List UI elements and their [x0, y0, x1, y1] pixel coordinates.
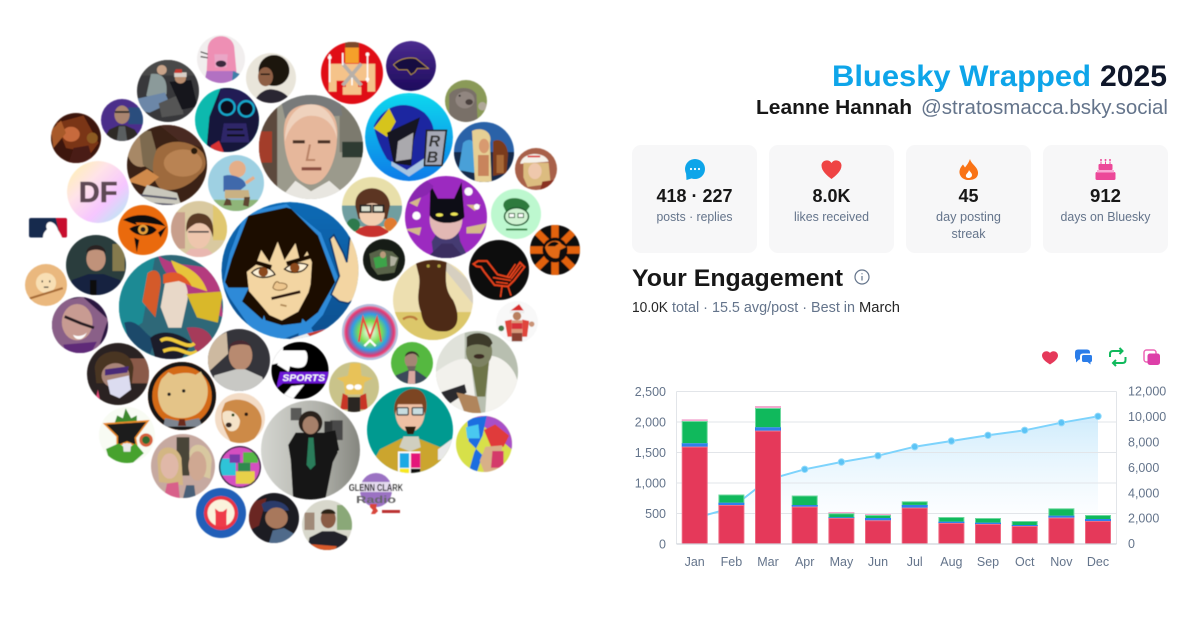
- stat card: likes: likes received: [794, 209, 869, 224]
- avatar: large brown-haired cartoon with raised hand: [222, 202, 362, 339]
- left axis labels: 0: [659, 538, 666, 552]
- avatar: Glenn Clark Radio logo: Radio: [356, 494, 396, 506]
- left axis labels: 1,500: [635, 446, 666, 460]
- month labels: Apr: [795, 555, 814, 569]
- right axis labels: 8,000: [1128, 436, 1159, 450]
- avatar: DF logo: DF: [79, 177, 118, 209]
- avatar: RB ranger helmet: B: [427, 150, 438, 167]
- avatar: sports logo: SPORTS: [282, 372, 326, 383]
- month labels: Oct: [1015, 555, 1035, 569]
- month labels: May: [830, 555, 854, 569]
- avatar: teal cartoon man: [367, 387, 455, 473]
- avatar: RB ranger helmet: R: [429, 134, 441, 151]
- month labels: Mar: [757, 555, 779, 569]
- icon: cake: [1096, 159, 1116, 180]
- avatar: group photo: [137, 60, 199, 122]
- icon: replies chat: [1075, 350, 1092, 364]
- right axis labels: [1128, 384, 1166, 551]
- engagement summary: 10.0K: [632, 300, 668, 316]
- month labels: [685, 555, 1109, 569]
- avatar: DF logo: [67, 161, 129, 223]
- avatar: Batman cartoon: [405, 176, 487, 258]
- avatar: beaver and man with cat: [127, 125, 207, 205]
- avatar: bear in a suit: [148, 362, 216, 430]
- avatar: Hulk in bathrobe: [436, 331, 518, 413]
- right axis labels: 0: [1128, 537, 1135, 551]
- right axis labels: 2,000: [1128, 512, 1159, 526]
- avatar: laughing man with glasses: [52, 297, 108, 353]
- engagement summary: total · 15.5 avg/post · Best in: [672, 300, 855, 316]
- avatar: Darth Vader with glasses: [195, 88, 259, 152]
- right axis labels: 4,000: [1128, 486, 1159, 500]
- avatar: man in black t-shirt: [302, 500, 352, 550]
- stat card: likes: 8.0K: [812, 186, 850, 206]
- icon: chat bubble: [685, 159, 705, 180]
- month labels: Jan: [685, 555, 705, 569]
- icon: quotes squares: [1144, 350, 1160, 365]
- title: Bluesky Wrapped 2025: 2025: [1100, 60, 1167, 93]
- avatar: RB ranger helmet: [365, 93, 453, 181]
- avatar: Glenn Clark Radio logo: [349, 473, 404, 514]
- left axis labels: 2,500: [635, 385, 666, 399]
- month labels: Jun: [868, 555, 888, 569]
- month labels: Jul: [907, 555, 923, 569]
- avatar: brown kitten painting: [393, 260, 473, 340]
- avatar: small psychedelic art: [219, 446, 261, 488]
- avatar: Ravens logo: [386, 41, 436, 91]
- stacked bars: [682, 406, 1111, 544]
- legend icons: [1042, 348, 1160, 366]
- stat card: posts and replies: 418 · 227: [656, 186, 732, 206]
- avatar: yellow cowboy cartoon: [329, 362, 379, 412]
- avatar: drawn smiley with pencil: [25, 264, 67, 306]
- avatar: cat badge: [196, 488, 246, 538]
- stat card: streak: [906, 145, 1031, 253]
- icon: info: [855, 270, 869, 284]
- stat card: days on Bluesky: [1043, 145, 1168, 253]
- cumulative area: [695, 416, 1098, 544]
- engagement summary: March: [859, 300, 900, 316]
- engagement summary: [632, 300, 900, 316]
- month labels: Nov: [1050, 555, 1073, 569]
- avatar: red pixel robot: [321, 42, 383, 104]
- avatar: three fantasy women: [454, 122, 514, 182]
- stat card: streak: streak: [952, 226, 986, 241]
- cumulative line: [695, 416, 1098, 518]
- right axis labels: 12,000: [1128, 384, 1166, 398]
- avatar: man in car: [208, 329, 270, 391]
- stat card: posts and replies: [632, 145, 757, 253]
- avatar: bald man portrait: [259, 95, 363, 199]
- avatar: pink-haired girl: [197, 35, 245, 83]
- left axis labels: 2,000: [635, 416, 666, 430]
- avatar: santa wrestler figure: [498, 303, 536, 342]
- line points: [802, 413, 1101, 472]
- right axis labels: 10,000: [1128, 410, 1166, 424]
- month labels: Feb: [721, 555, 742, 569]
- avatar: wombat: [445, 80, 487, 122]
- month labels: Aug: [940, 555, 963, 569]
- avatar: blonde person in hat: [515, 148, 557, 190]
- avatar: red line bird on black: [469, 240, 529, 300]
- avatar: green star sunglasses: [99, 407, 155, 463]
- stat card: streak: day posting: [936, 209, 1001, 224]
- avatar: green smiling face: [491, 189, 541, 239]
- avatar: Glenn Clark Radio logo: GLENN CLARK: [349, 482, 403, 494]
- right axis labels: 6,000: [1128, 461, 1159, 475]
- month labels: Dec: [1087, 555, 1109, 569]
- left axis labels: [635, 385, 666, 552]
- month labels: Sep: [977, 555, 999, 569]
- avatar: man on green background: [391, 342, 433, 384]
- left axis labels: 1,000: [635, 476, 666, 490]
- avatar: orange eye: [118, 205, 168, 255]
- avatar: Orioles flag: [530, 225, 580, 275]
- avatar: rainbow badge: [342, 304, 398, 360]
- avatar: man in dark jacket with microphone: [66, 235, 126, 295]
- chart: monthly engagement bars with cumulative line: [635, 384, 1166, 569]
- stat card: days on Bluesky: 912: [1090, 186, 1121, 206]
- avatar cluster: [25, 35, 580, 550]
- stat card: days on Bluesky: days on Bluesky: [1060, 209, 1151, 224]
- icon: reposts arrows: [1110, 348, 1126, 366]
- user name and handle: Leanne Hannah: [756, 97, 912, 119]
- stat card: likes: [769, 145, 894, 253]
- avatar: red-tinted portrait: [51, 113, 101, 163]
- avatar: colourful illustrated warrior: [119, 255, 223, 359]
- icon: likes heart: [1042, 351, 1058, 364]
- avatar: blonde couple: [151, 434, 215, 498]
- avatar: bald cartoon man walking: [208, 155, 264, 211]
- stat card: streak: 45: [958, 186, 978, 206]
- avatar: man in black suit with green tie: [261, 400, 360, 500]
- user name and handle: @stratosmacca.bsky.social: [921, 97, 1168, 119]
- avatar: sleeping man with hat: [249, 493, 299, 543]
- avatar: small green warrior: [363, 239, 405, 281]
- icon: heart: [822, 160, 842, 179]
- left axis labels: 500: [645, 507, 666, 521]
- avatar: golden dog: [215, 393, 265, 443]
- user name and handle: [756, 97, 1168, 119]
- avatar: woman with short hair and glasses: [171, 201, 227, 257]
- avatar: sports logo: [272, 342, 328, 399]
- avatar: robot ranger pair: [456, 416, 512, 472]
- avatar: man with glasses: [101, 99, 143, 141]
- avatar: Mii with glasses: [342, 177, 402, 237]
- heading: Your Engagement: Your Engagement: [632, 265, 843, 292]
- avatar: curly-haired woman: [246, 53, 296, 103]
- title: Bluesky Wrapped 2025: Bluesky Wrapped: [832, 60, 1091, 93]
- stat card: posts and replies: posts · replies: [656, 209, 733, 224]
- icon: flame: [959, 159, 978, 180]
- avatar: person with mask: [87, 343, 149, 405]
- avatar: MLB logo: [29, 218, 67, 238]
